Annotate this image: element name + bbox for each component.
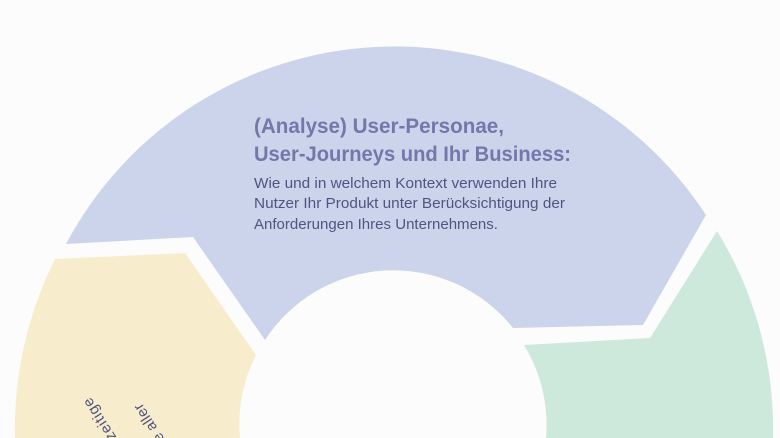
- panel: left segment: [15, 253, 256, 438]
- heading: analyse: User-Journeys und Ihr Business:: [254, 142, 571, 166]
- text block: analyse description: Nutzer Ihr Produkt unter Berücksichtigung der: [254, 196, 565, 212]
- panel: right segment: [524, 231, 773, 438]
- text block: analyse description: Anforderungen Ihres Unternehmens.: [254, 217, 498, 233]
- text block: analyse description: Wie und in welchem Kontext verwenden Ihre: [254, 176, 557, 192]
- heading: analyse: (Analyse) User-Personae,: [254, 114, 504, 138]
- panel: analyse segment: [66, 46, 706, 340]
